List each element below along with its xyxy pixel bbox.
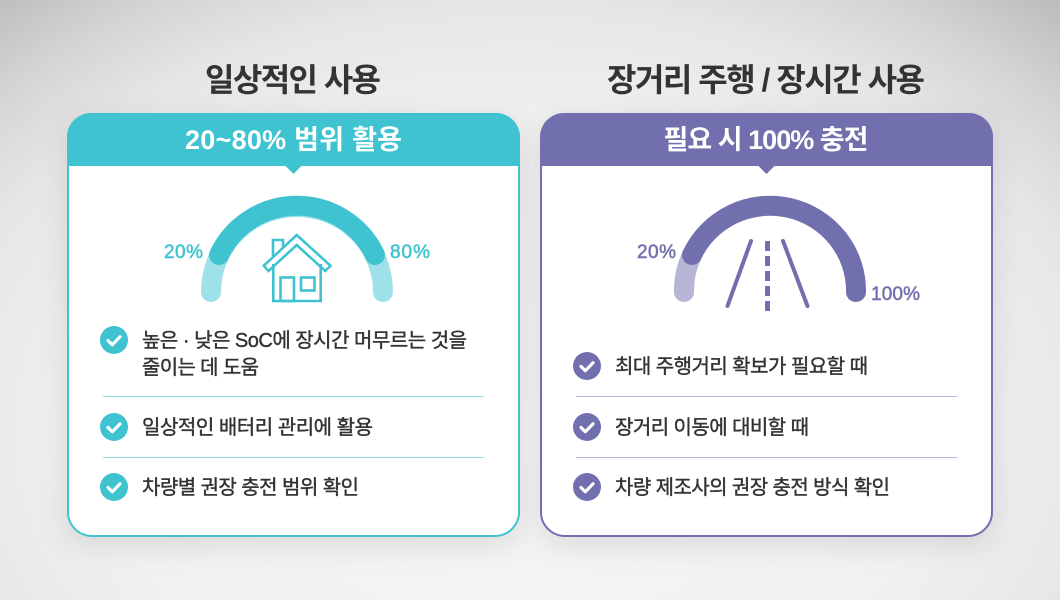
- check icon: [573, 413, 601, 441]
- check icon: [573, 352, 601, 380]
- icon: road: [728, 241, 808, 311]
- title: daily use: 일상적인 사용: [205, 62, 381, 98]
- check icon: [100, 413, 128, 441]
- gauge: 20 to 80 percent: [211, 206, 383, 292]
- list item 3: [573, 473, 890, 501]
- label 20%: 20%: [637, 242, 676, 263]
- card body: [541, 114, 992, 536]
- list item 3: [100, 473, 359, 501]
- item text: 일상적인 배터리 관리에 활용: [142, 416, 373, 439]
- item text: 줄이는 데 도움: [142, 356, 259, 379]
- card header: [540, 113, 993, 174]
- label 100%: 100%: [871, 284, 920, 305]
- header text: 20~80% 범위 활용: [185, 125, 402, 155]
- card header: [67, 113, 520, 174]
- list item 1: [573, 352, 868, 380]
- item text: 장거리 이동에 대비할 때: [615, 416, 809, 439]
- panel: daily use: [67, 113, 520, 536]
- check icon: [100, 326, 128, 354]
- gauge: 20 to 100 percent: [684, 206, 856, 292]
- list item 1: [100, 326, 467, 379]
- item text: 최대 주행거리 확보가 필요할 때: [615, 355, 868, 378]
- label 80%: 80%: [390, 242, 430, 263]
- header text: 필요 시 100% 충전: [664, 125, 868, 155]
- item text: 차량별 권장 충전 범위 확인: [142, 476, 359, 499]
- item text: 높은 · 낮은 SoC에 장시간 머무르는 것을: [142, 329, 467, 352]
- panel: long-distance use: [540, 113, 993, 536]
- item text: 차량 제조사의 권장 충전 방식 확인: [615, 476, 890, 499]
- title: long-distance use: 장거리 주행 / 장시간 사용: [607, 62, 925, 98]
- card body: [68, 114, 519, 536]
- list item 2: [573, 413, 809, 441]
- label 20%: 20%: [164, 242, 203, 263]
- icon: house: [264, 235, 330, 301]
- check icon: [573, 473, 601, 501]
- check icon: [100, 473, 128, 501]
- list item 2: [100, 413, 373, 441]
